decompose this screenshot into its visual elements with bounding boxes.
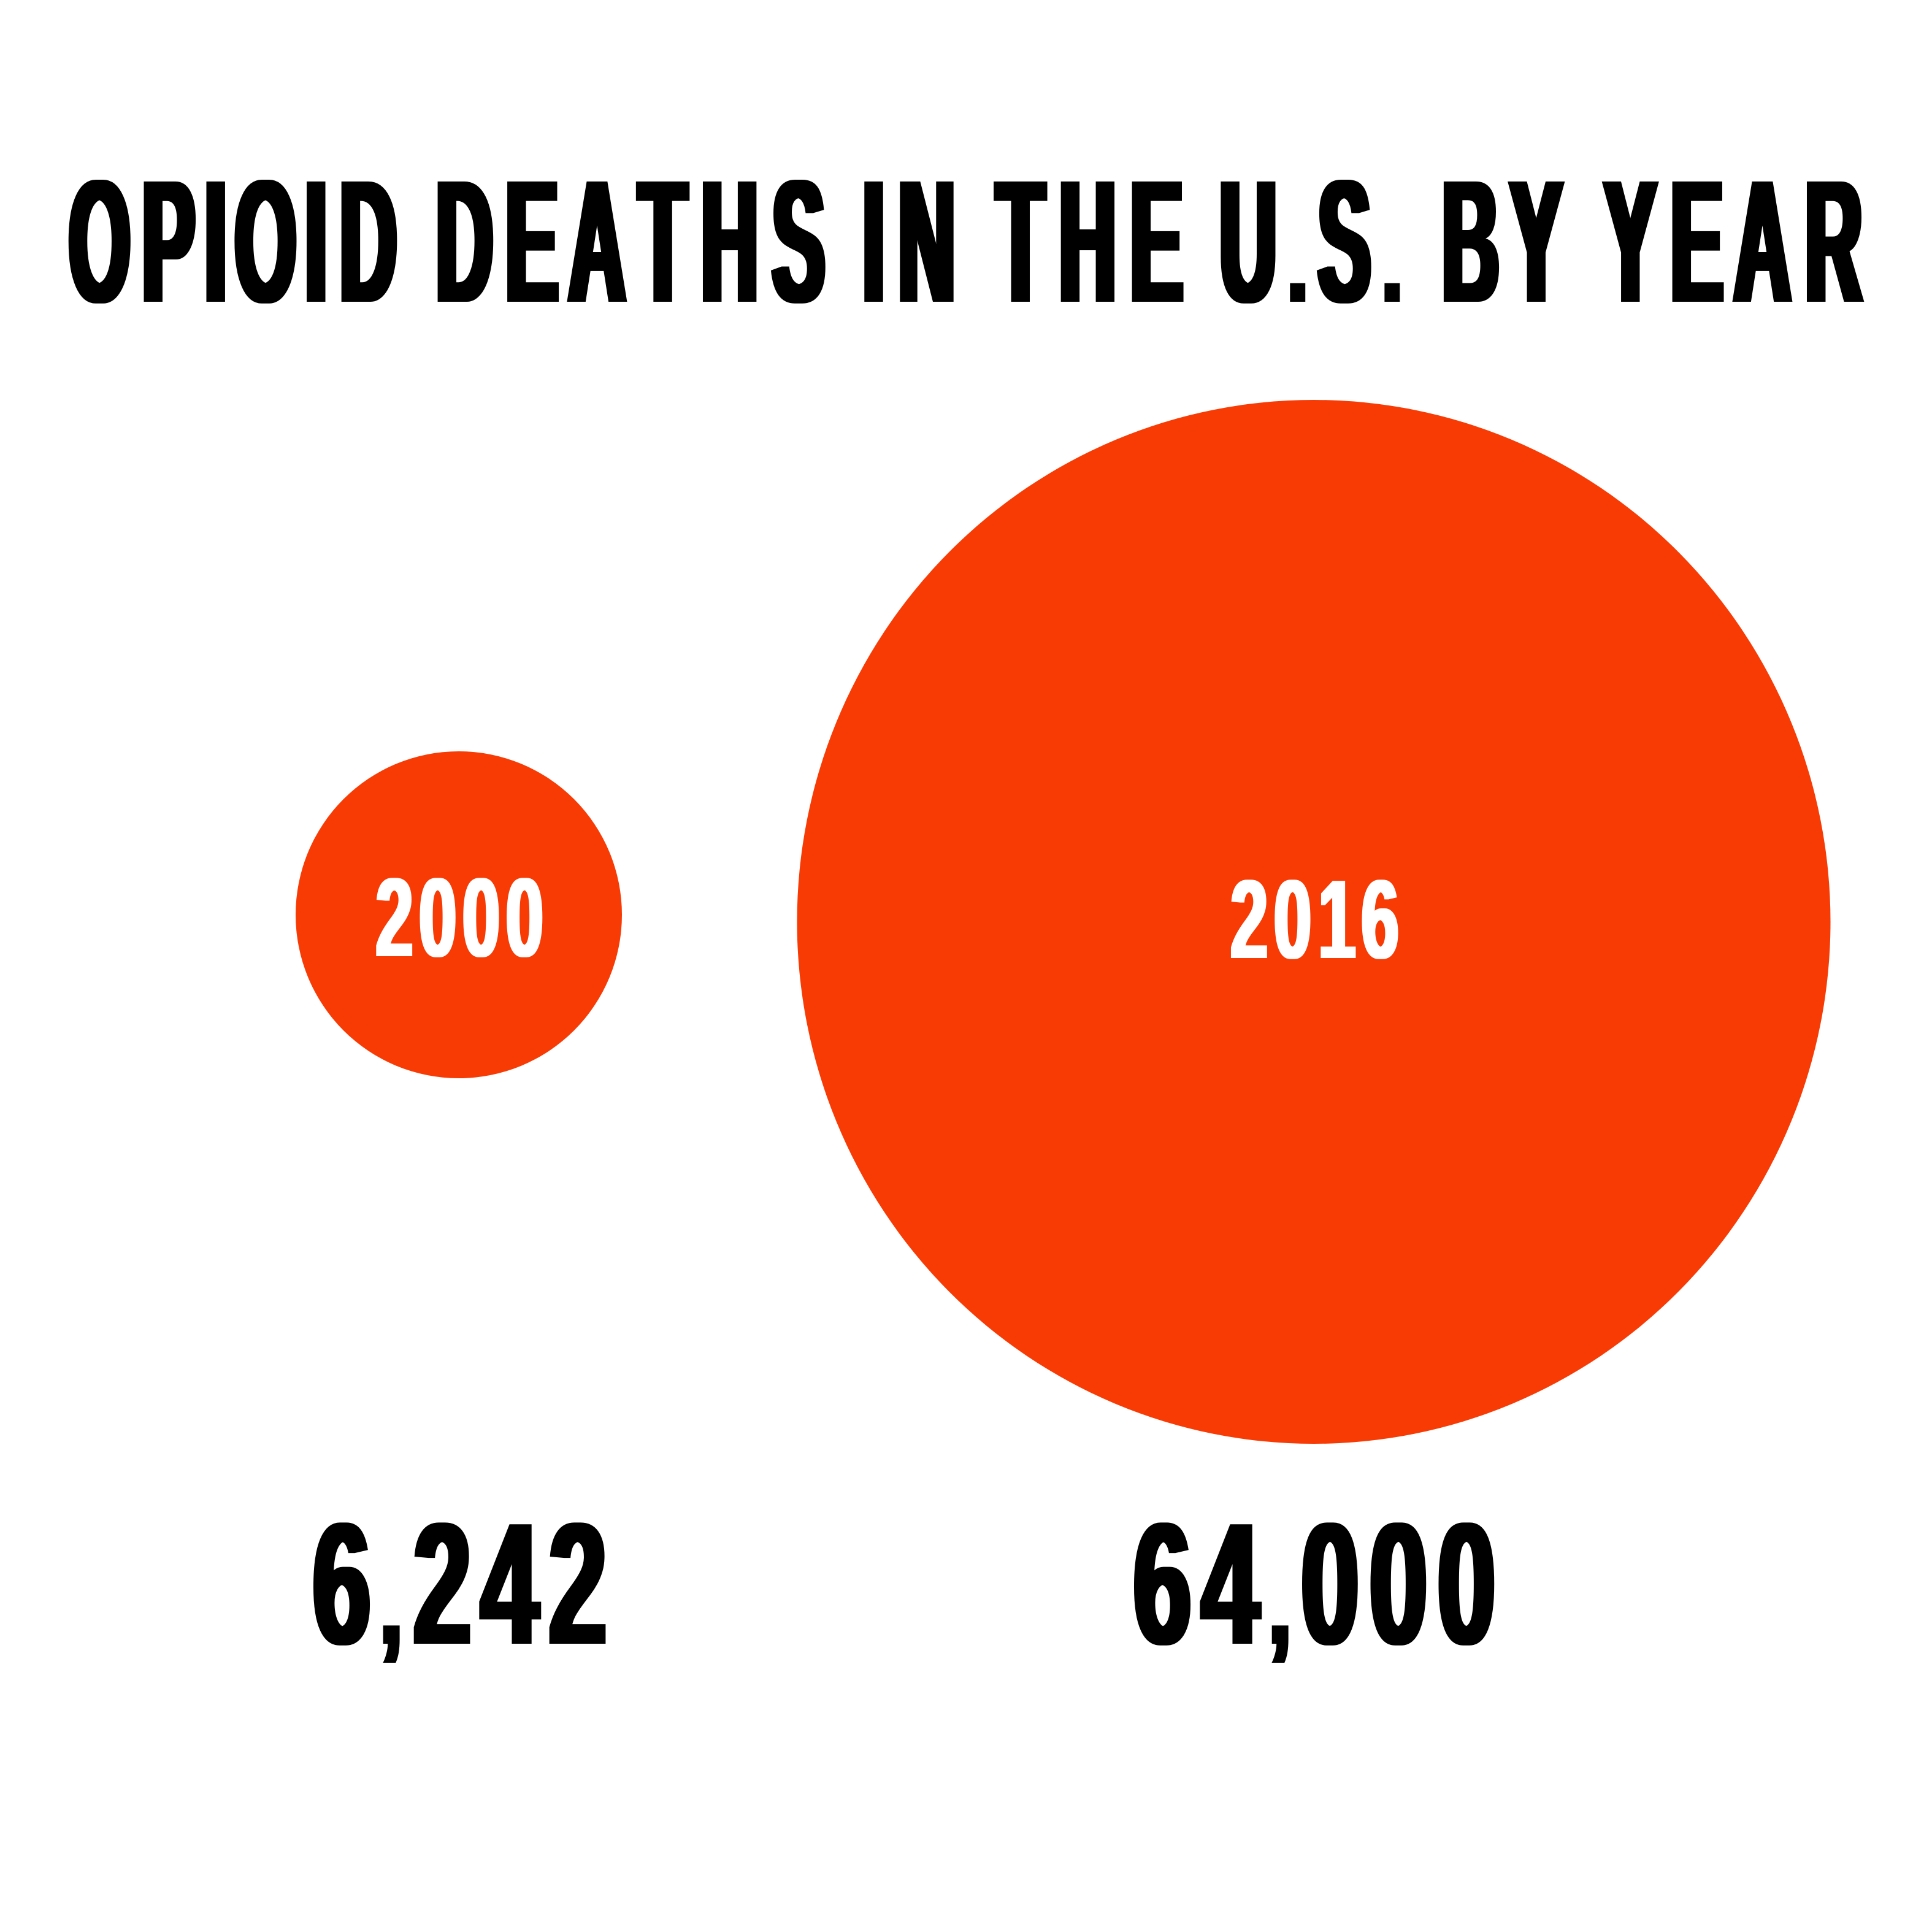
year label: 2016: 2016 [1230, 856, 1399, 982]
circle: 2000 deaths [296, 751, 622, 1078]
year label: 2000: 2000 [375, 854, 543, 980]
value: 64,000: 64,000 [1133, 1487, 1495, 1681]
title: OPIOID DEATHS IN THE U.S. BY YEAR [69, 144, 1862, 339]
circle: 2016 deaths [797, 400, 1830, 1444]
value: 6,242: 6,242 [313, 1487, 607, 1681]
